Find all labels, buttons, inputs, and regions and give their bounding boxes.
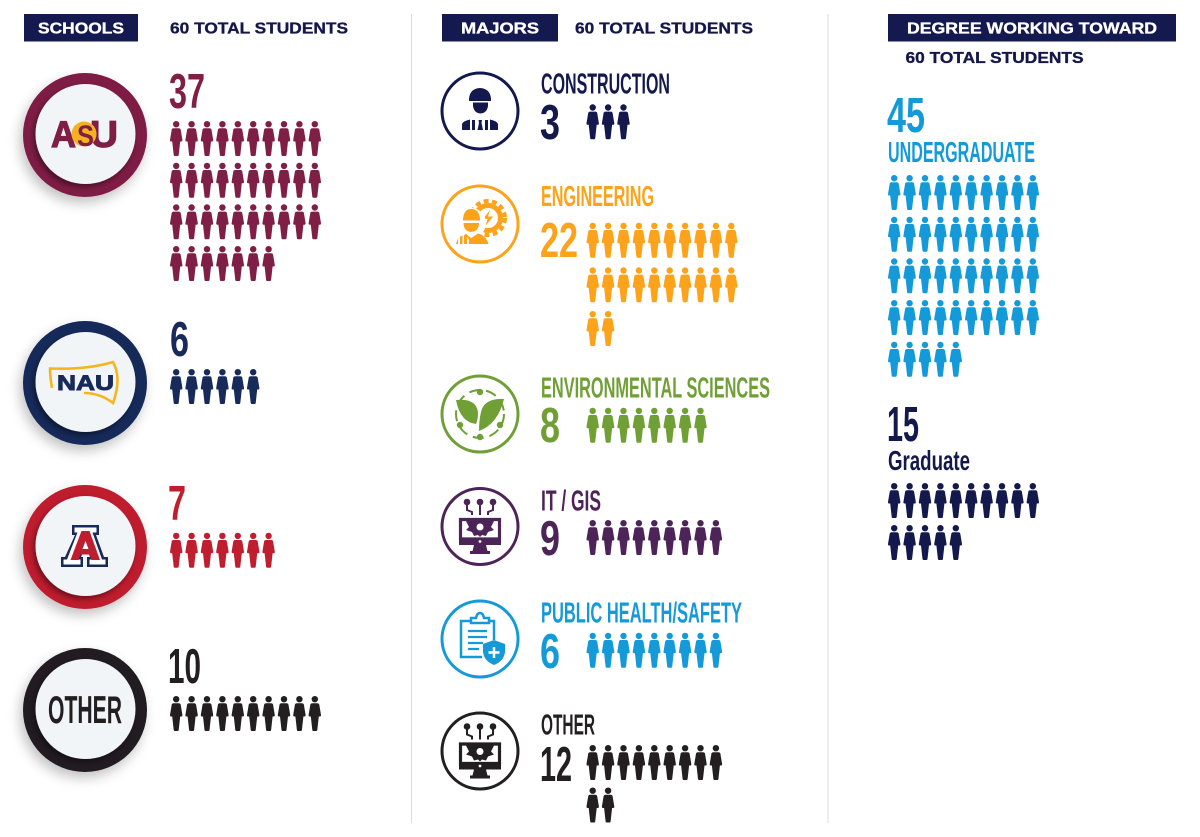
stat: graduate 15: 15 <box>887 398 919 452</box>
stat: ASU 37: 37 <box>169 65 205 119</box>
stat: IT 9: 9 <box>540 512 560 566</box>
icon: ASU badge: S <box>77 120 94 153</box>
panel: majors <box>442 14 770 822</box>
pictogram: other school students <box>170 696 321 731</box>
pictogram: undergraduate students <box>888 175 1039 377</box>
label: IT / GIS: IT / GIS <box>541 486 601 518</box>
label: public health and safety: PUBLIC HEALTH/SAFETY <box>541 598 742 630</box>
icon: other schools badge <box>23 648 147 772</box>
label: graduate: Graduate <box>888 445 970 476</box>
panel: degree working toward <box>887 14 1176 560</box>
label: undergraduate: UNDERGRADUATE <box>888 137 1035 169</box>
icon: other majors monitor and gear <box>442 713 518 789</box>
stat: environmental 8: 8 <box>540 399 560 453</box>
pictogram: public health students <box>586 633 722 668</box>
pictogram: Arizona students <box>170 533 275 568</box>
stat: Arizona 7: 7 <box>168 477 186 531</box>
stat: NAU 6: 6 <box>170 313 189 367</box>
stat: undergraduate 45: 45 <box>887 89 925 143</box>
heading: schools <box>24 14 138 42</box>
icon: engineering worker and gear <box>442 186 518 262</box>
heading: majors <box>442 14 558 42</box>
text: degree total: 60 TOTAL STUDENTS <box>906 50 1084 67</box>
heading: majors: MAJORS <box>461 20 539 38</box>
stat: engineering 22: 22 <box>540 214 578 268</box>
icon: ASU badge: U <box>90 114 118 155</box>
pictogram: construction students <box>586 104 630 139</box>
pictogram: environmental students <box>586 408 707 443</box>
icon: University of Arizona badge <box>23 485 147 609</box>
panel: schools <box>23 14 348 772</box>
pictogram: ASU students <box>170 121 321 281</box>
pictogram: engineering students <box>586 223 738 346</box>
icon: public health clipboard <box>442 601 518 677</box>
icon: IT monitor and gear <box>442 488 518 564</box>
icon: ASU badge <box>23 73 147 197</box>
icon: NAU badge: NAU <box>57 372 114 395</box>
pictogram: IT students <box>586 520 722 555</box>
pictogram: other major students <box>586 745 722 822</box>
icon: other schools badge: OTHER <box>48 689 122 732</box>
icon: construction worker <box>442 73 518 149</box>
stat: other majors 12: 12 <box>540 738 572 792</box>
label: other majors: OTHER <box>541 710 595 742</box>
text: schools total: 60 TOTAL STUDENTS <box>170 20 348 38</box>
heading: degree working toward <box>888 14 1176 42</box>
pictogram: graduate students <box>888 483 1039 560</box>
heading: schools: SCHOOLS <box>38 20 124 38</box>
label: environmental sciences: ENVIRONMENTAL SCIENCES <box>541 372 770 404</box>
heading: degree working toward: DEGREE WORKING TOWARD <box>907 20 1157 38</box>
label: engineering: ENGINEERING <box>541 181 654 213</box>
stat: public health 6: 6 <box>540 625 560 679</box>
label: construction: CONSTRUCTION <box>541 68 670 100</box>
icon: NAU badge <box>23 321 147 445</box>
stat: other schools 10: 10 <box>168 640 201 694</box>
stat: construction 3: 3 <box>540 96 560 150</box>
pictogram: NAU students <box>170 369 259 404</box>
icon: environmental leaves <box>442 376 518 452</box>
icon: ASU badge: A <box>51 114 76 155</box>
text: majors total: 60 TOTAL STUDENTS <box>575 20 753 38</box>
